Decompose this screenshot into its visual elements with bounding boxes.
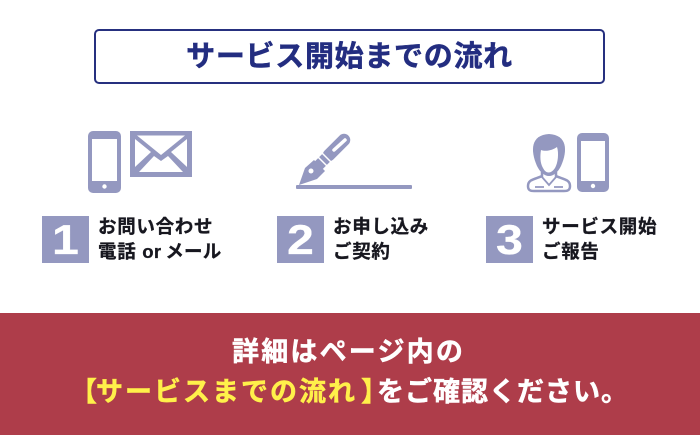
step 1 number bbox=[42, 216, 89, 263]
step 1 number: 1 bbox=[52, 216, 79, 263]
step 2 number: 2 bbox=[287, 216, 314, 263]
step 1 label: 電話 orメール bbox=[98, 241, 221, 262]
step 2 label bbox=[333, 216, 429, 262]
step 1 label bbox=[98, 216, 221, 262]
closing phrase: をご確認ください。 bbox=[377, 377, 629, 407]
step 2 label: お申し込み bbox=[333, 216, 429, 237]
step 3 number bbox=[486, 216, 533, 263]
step 3 label: サービス開始 bbox=[542, 216, 657, 237]
step 3 label: ご報告 bbox=[542, 241, 600, 262]
step 2 number bbox=[277, 216, 324, 263]
icon: person and phone bbox=[526, 133, 609, 192]
icon: fountain pen bbox=[296, 134, 412, 189]
title box: サービス開始までの流れ bbox=[186, 41, 513, 73]
title box bbox=[94, 29, 605, 84]
step 3 number: 3 bbox=[496, 216, 523, 263]
step 2 label: ご契約 bbox=[333, 241, 391, 262]
footer line 2 bbox=[70, 376, 629, 407]
step 3 label bbox=[542, 216, 657, 262]
yellow highlighted phrase: 【サービスまでの流れ】 bbox=[70, 377, 388, 407]
icon: phone and envelope bbox=[88, 131, 192, 193]
step 1 label: お問い合わせ bbox=[98, 216, 213, 237]
footer line 1: 詳細はページ内の bbox=[232, 337, 465, 367]
footer banner bbox=[0, 313, 700, 435]
